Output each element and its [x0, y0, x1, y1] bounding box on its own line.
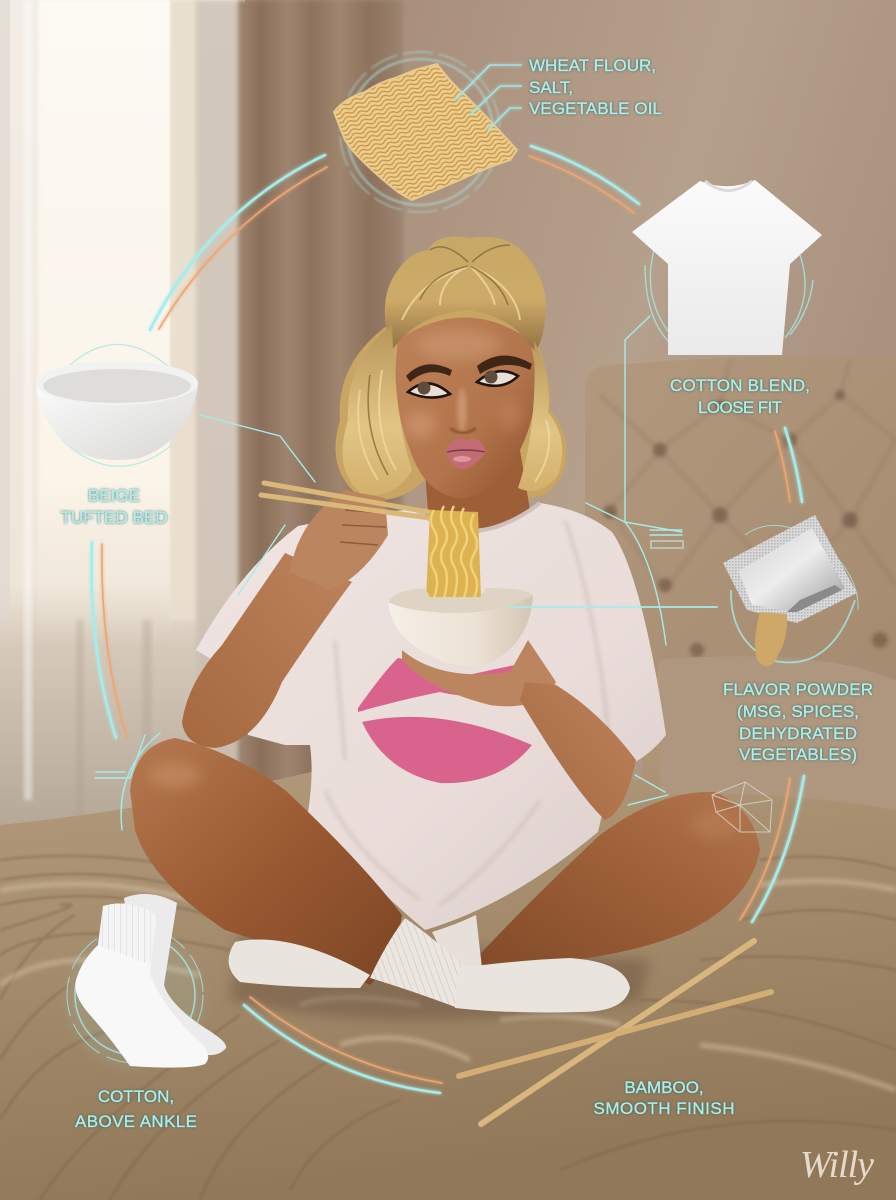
noodles lifted: [426, 506, 481, 598]
window with sheer curtains: [0, 0, 245, 830]
ingredients label: VEGETABLE OIL: [529, 99, 662, 118]
arc right lower: [740, 776, 804, 922]
noodle cake: [334, 64, 517, 200]
t-shirt: [196, 503, 666, 930]
packet label: VEGETABLES): [739, 745, 857, 764]
chopsticks label: BAMBOO,: [624, 1078, 704, 1097]
ingredients label: WHEAT FLOUR,: [529, 56, 656, 75]
bowl and holding hand: [388, 588, 636, 820]
ingredients label: [529, 56, 662, 118]
ramen noodle block: [334, 52, 662, 212]
packet label: FLAVOR POWDER: [723, 680, 873, 699]
HUD thin pointers: [95, 316, 717, 830]
tufted headboard: [585, 356, 896, 690]
white t-shirt icon: [632, 180, 822, 417]
arc right upper: [775, 428, 802, 502]
packet label: [723, 680, 873, 764]
hair back: [336, 300, 566, 500]
chopsticks in hand: [261, 483, 440, 518]
socks label: COTTON,: [98, 1087, 174, 1106]
chopsticks on bed: [459, 941, 771, 1124]
left arm with raised hand: [182, 490, 388, 748]
white bowl icon: [36, 344, 198, 527]
white socks icon: [67, 894, 226, 1131]
wireframe knee scan: [712, 782, 772, 832]
socks label: [75, 1087, 197, 1131]
bowl label: TUFTED BED: [60, 508, 168, 527]
face: [396, 318, 536, 498]
arc left: [92, 542, 127, 738]
chopsticks label: [594, 1078, 734, 1118]
socks label: ABOVE ANKLE: [75, 1112, 197, 1131]
lips print: [358, 658, 557, 783]
t-shirt label: [670, 376, 810, 417]
bowl label: BEIGE: [88, 486, 140, 505]
wall: [395, 0, 896, 800]
bowl label: [60, 486, 168, 527]
arc top right: [529, 146, 639, 213]
legs: [130, 738, 760, 985]
t-shirt label: COTTON BLEND,: [670, 376, 810, 395]
arc bottom: [244, 997, 442, 1093]
HUD connector arcs: [92, 146, 804, 1093]
brown curtains: [238, 0, 403, 790]
packet label: DEHYDRATED: [739, 724, 857, 743]
ingredients label: SALT,: [529, 78, 573, 97]
t-shirt label: LOOSE FIT: [698, 398, 782, 417]
socks on feet: [229, 915, 630, 1012]
arc top left: [150, 155, 327, 330]
neck: [425, 450, 530, 533]
halo rings: [340, 52, 500, 212]
chopsticks label: SMOOTH FINISH: [594, 1099, 734, 1118]
bed: [0, 656, 896, 1200]
flavor powder packet: [723, 515, 873, 764]
woman eating noodles: [130, 236, 760, 1012]
hair front and ponytail: [342, 236, 562, 495]
packet label: (MSG, SPICES,: [737, 702, 859, 721]
signature: Willy: [800, 1144, 874, 1186]
pointer lines: [455, 65, 522, 130]
